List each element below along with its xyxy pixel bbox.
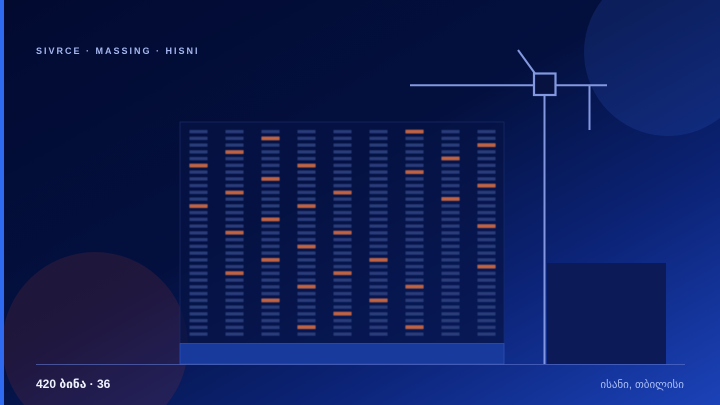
window columns	[198, 130, 486, 336]
crane hoist line	[588, 85, 590, 130]
circle: top right	[584, 0, 720, 136]
building facade	[180, 122, 504, 344]
circle: bottom left	[2, 252, 188, 405]
location: ისანი, თბილისი	[600, 379, 684, 391]
lit windows	[190, 130, 496, 329]
crane jib	[410, 84, 607, 86]
crane cab	[534, 74, 556, 95]
ground line	[36, 364, 685, 366]
building: main block	[180, 122, 504, 344]
crane	[410, 50, 607, 364]
podium	[180, 344, 504, 364]
unit count: 420 ბინა · 36	[36, 377, 111, 391]
crane mast	[544, 95, 546, 364]
side tower	[547, 263, 666, 364]
crane back stay	[518, 50, 535, 74]
heading: SIVRCE · MASSING · HISNI	[36, 46, 200, 56]
left accent bar	[0, 0, 4, 405]
